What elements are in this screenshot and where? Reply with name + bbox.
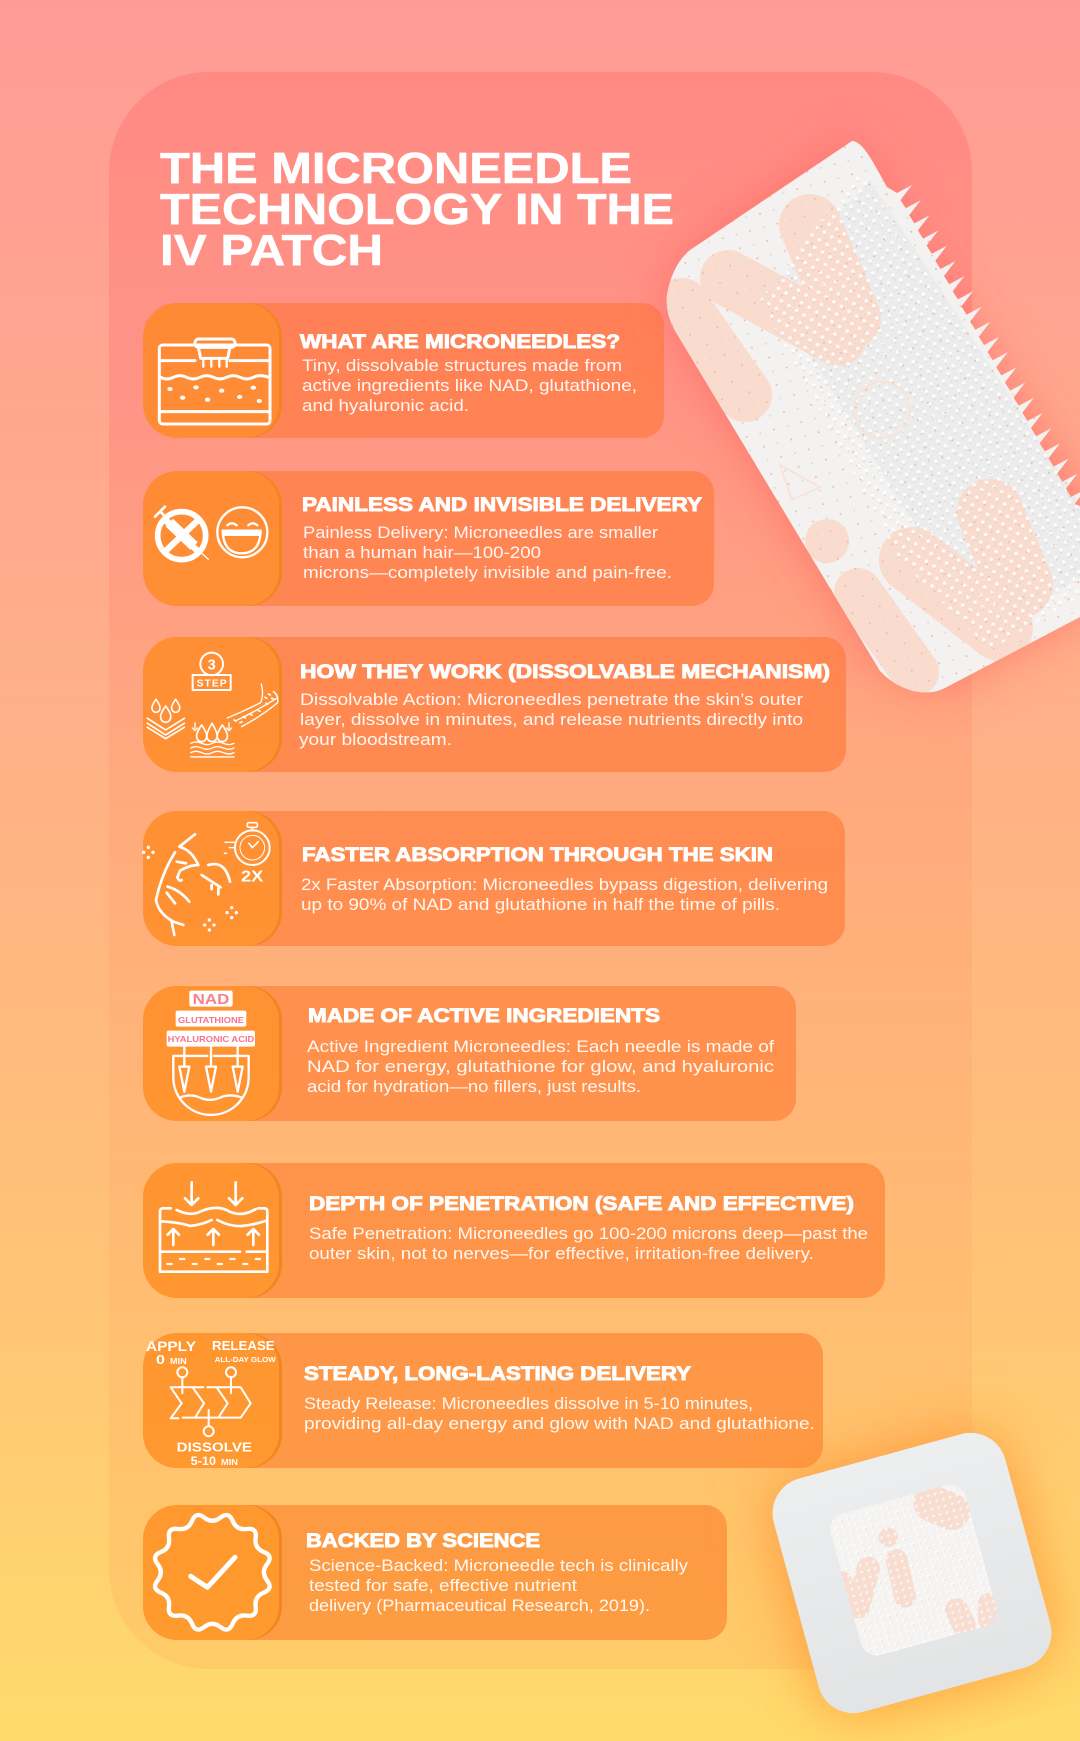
panel: main rounded panel (109, 72, 972, 1669)
text: depth of penetration: outer skin, not to nerves—for effective, irritation-free delivery. (309, 1244, 814, 1263)
text: backed by science (306, 1531, 689, 1615)
title (160, 144, 674, 275)
icon: apply, dissolve, release timeline: 0 (156, 1352, 165, 1367)
text: backed by science: delivery (Pharmaceutical Research, 2019). (309, 1596, 650, 1615)
text: made of active ingredients: MADE OF ACTIVE INGREDIENTS (308, 1006, 660, 1027)
icon: skin depth with arrows (160, 1182, 267, 1272)
icon: apply, dissolve, release timeline: 5-10 (191, 1454, 216, 1468)
text: what are microneedles (300, 332, 637, 415)
image: large microneedle patch, top right (657, 141, 1080, 702)
icon: skin and stopwatch 2x: 2X (241, 869, 264, 886)
text: made of active ingredients: Active Ingredient Microneedles: Each needle is made of (307, 1037, 774, 1056)
text: steady long lasting delivery (304, 1364, 815, 1433)
text: backed by science: tested for safe, effective nutrient (309, 1576, 577, 1595)
card 3: how they work (143, 637, 846, 772)
icon: three step dissolving process: 3 (208, 657, 216, 673)
text: faster absorption (301, 845, 828, 914)
text: faster absorption: up to 90% of NAD and glutathione in half the time of pills. (301, 895, 780, 914)
icon: ingredient labels and needles: HYALURONIC ACID (168, 1034, 254, 1044)
text: steady long lasting delivery: Steady Release: Microneedles dissolve in 5-10 minutes, (304, 1394, 753, 1413)
icon: three step dissolving process (147, 653, 278, 757)
text: painless and invisible delivery: than a human hair—100-200 (303, 543, 541, 562)
text: depth of penetration: DEPTH OF PENETRATION (SAFE AND EFFECTIVE) (309, 1194, 854, 1215)
card 5: made of active ingredients (143, 986, 796, 1121)
title: THE MICRONEEDLE (160, 144, 632, 193)
icon: three step dissolving process: STEP (197, 679, 227, 690)
text: what are microneedles: and hyaluronic acid. (302, 396, 469, 415)
text: steady long lasting delivery: STEADY, LONG-LASTING DELIVERY (304, 1364, 691, 1385)
icon: apply, dissolve, release timeline: DISSOLVE (177, 1440, 252, 1455)
card 6: depth of penetration (143, 1163, 885, 1298)
icon: apply, dissolve, release timeline (146, 1338, 276, 1468)
text: backed by science: Science-Backed: Microneedle tech is clinically (309, 1556, 689, 1575)
card 1: what are microneedles (143, 303, 664, 438)
text: depth of penetration: Safe Penetration: Microneedles go 100-200 microns deep—past the (309, 1224, 868, 1243)
text: how they work: Dissolvable Action: Microneedles penetrate the skin’s outer (300, 690, 803, 709)
icon: apply, dissolve, release timeline: RELEASE (212, 1338, 275, 1353)
text: faster absorption: FASTER ABSORPTION THROUGH THE SKIN (302, 845, 773, 866)
text: made of active ingredients: acid for hydration—no fillers, just results. (307, 1077, 641, 1096)
text: made of active ingredients: NAD for energy, glutathione for glow, and hyaluronic (307, 1057, 775, 1076)
card 2: painless and invisible delivery (143, 471, 714, 606)
card 7: steady long lasting delivery (143, 1333, 823, 1468)
text: backed by science: BACKED BY SCIENCE (306, 1531, 540, 1552)
text: painless and invisible delivery: microns—completely invisible and pain-free. (303, 563, 672, 582)
icon: skin and stopwatch 2x (142, 823, 270, 935)
text: how they work: HOW THEY WORK (DISSOLVABLE MECHANISM) (300, 662, 830, 683)
icon: ingredient labels and needles: NAD (193, 991, 230, 1008)
text: what are microneedles: WHAT ARE MICRONEEDLES? (300, 332, 620, 353)
icon: ingredient labels and needles: GLUTATHIONE (178, 1015, 244, 1025)
title: TECHNOLOGY IN THE (160, 185, 674, 234)
text: made of active ingredients (307, 1006, 775, 1096)
image: square microneedle patch, bottom right (764, 1425, 1060, 1721)
title: IV PATCH (160, 226, 383, 275)
icon: apply, dissolve, release timeline: APPLY (146, 1338, 197, 1354)
icon: apply, dissolve, release timeline: ALL-DAY GLOW (215, 1355, 276, 1364)
text: how they work: layer, dissolve in minutes, and release nutrients directly into (300, 710, 803, 729)
icon: apply, dissolve, release timeline: MIN (170, 1357, 187, 1366)
text: painless and invisible delivery: Painless Delivery: Microneedles are smaller (303, 523, 658, 542)
icon: ingredient labels and needles (167, 991, 255, 1115)
text: depth of penetration (309, 1194, 868, 1263)
text: how they work: your bloodstream. (299, 730, 452, 749)
card 8: backed by science (143, 1505, 727, 1640)
text: painless and invisible delivery: PAINLESS AND INVISIBLE DELIVERY (302, 495, 702, 516)
text: painless and invisible delivery (302, 495, 702, 582)
icon: crossed syringe and smiling face (155, 507, 267, 560)
text: faster absorption: 2x Faster Absorption: Microneedles bypass digestion, delivering (301, 875, 828, 894)
text: what are microneedles: Tiny, dissolvable structures made from (302, 356, 622, 375)
text: what are microneedles: active ingredients like NAD, glutathione, (302, 376, 637, 395)
icon: apply, dissolve, release timeline: MIN (221, 1458, 238, 1467)
icon: skin layers with microneedle device (159, 339, 270, 424)
text: how they work (299, 662, 830, 749)
card 4: faster absorption (142, 811, 845, 946)
icon: verified badge with check (155, 1515, 270, 1630)
text: steady long lasting delivery: providing all-day energy and glow with NAD and glutathione. (304, 1414, 815, 1433)
